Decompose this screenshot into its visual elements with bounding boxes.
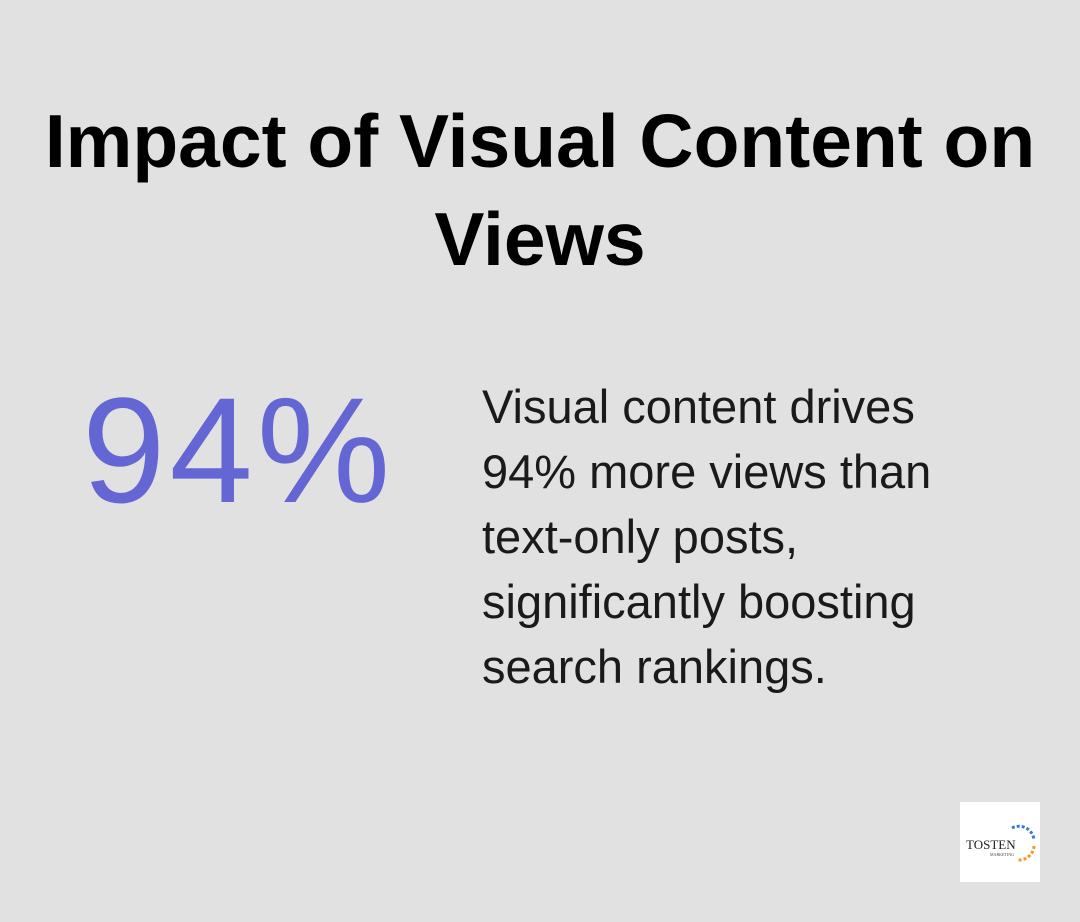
title: Views — [434, 197, 646, 281]
description: significantly boosting — [482, 575, 916, 628]
logo — [960, 802, 1040, 882]
big stat: 94% — [82, 366, 394, 534]
description: search rankings. — [482, 640, 827, 693]
logo: TOSTEN — [966, 837, 1016, 852]
title — [45, 99, 1035, 281]
description — [482, 380, 931, 693]
description: text-only posts, — [482, 510, 798, 563]
description: 94% more views than — [482, 445, 931, 498]
description: Visual content drives — [482, 380, 915, 433]
title: Impact of Visual Content on — [45, 99, 1035, 183]
logo: MARKETING — [990, 852, 1014, 857]
